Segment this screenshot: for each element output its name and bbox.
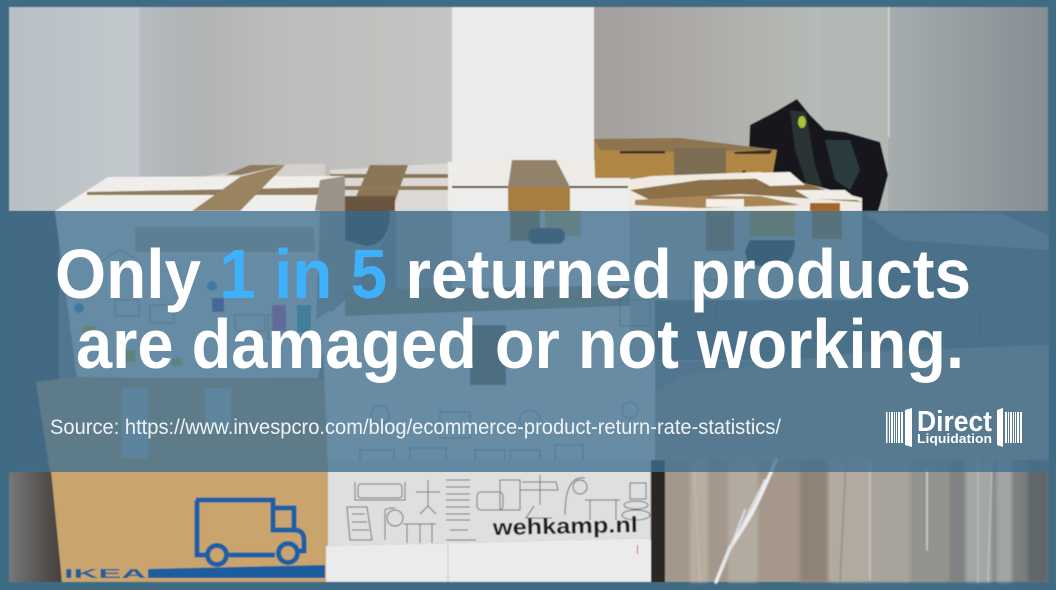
photo: bag and top row boxes <box>55 99 888 246</box>
photo: coloured doodles <box>74 281 311 366</box>
text: wehkamp.nl: wehkamp.nl <box>491 512 638 540</box>
furniture line drawings <box>347 475 650 543</box>
text: IKEA: IKEA <box>64 566 148 581</box>
photo: IKEA cardboard box <box>50 460 333 582</box>
headline line 1: Only 1 in 5 returned products <box>55 235 971 313</box>
logo: wordmark <box>917 406 992 446</box>
photo: dark wall at lower left <box>9 472 61 582</box>
photo: boxes behind the band <box>9 211 1048 472</box>
logo: right barcode <box>997 408 1022 447</box>
photo: white wehkamp box <box>326 460 655 582</box>
icon: delivery truck <box>196 500 304 564</box>
logo: left barcode <box>886 408 912 447</box>
photo: walls <box>9 7 1048 411</box>
photo: dark gap <box>651 460 666 582</box>
photo: plastic-wrapped item <box>665 460 1048 582</box>
logo: Direct Liquidation <box>886 406 1022 447</box>
photo: black bag <box>748 99 888 211</box>
translucent blue band <box>9 211 1048 472</box>
headline line 2: are damaged or not working. <box>76 305 964 383</box>
logo: Direct: Direct <box>917 406 992 438</box>
headline <box>55 235 971 383</box>
source citation: Source: https://www.invespcro.com/blog/ecommerce-product-return-rate-statistics/ <box>50 416 781 439</box>
photo: doodles behind the band <box>100 250 980 468</box>
logo: Liquidation: Liquidation <box>917 431 992 446</box>
